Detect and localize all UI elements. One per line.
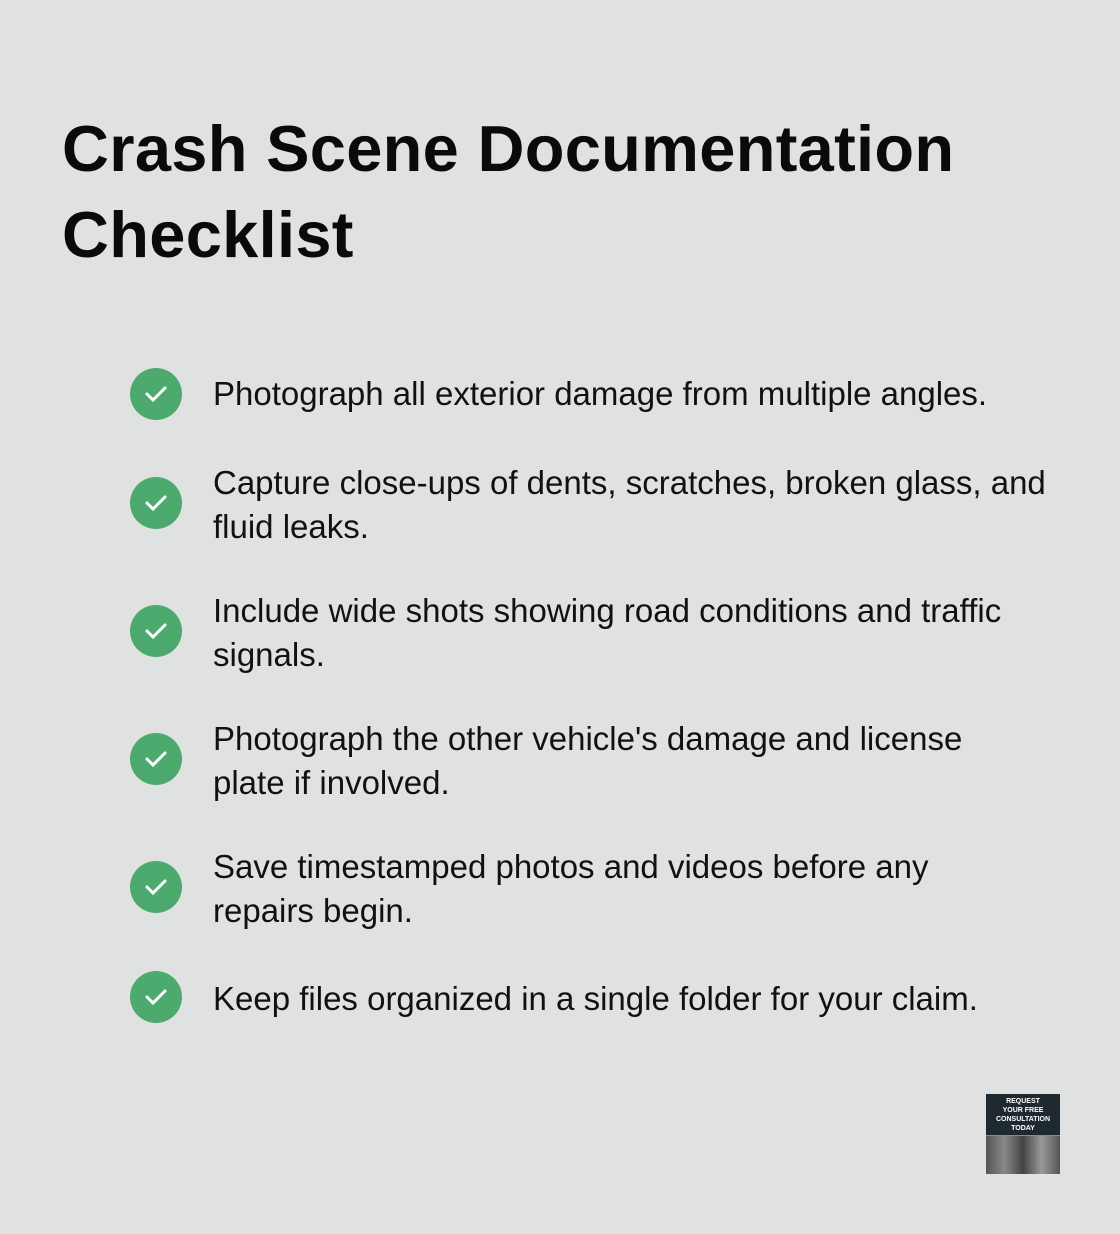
item 2	[130, 464, 1046, 545]
text 5: Save timestamped photos and videos before any	[213, 848, 928, 885]
title: Crash Scene Documentation	[62, 112, 954, 185]
text 3: signals.	[213, 636, 325, 673]
icon: check	[130, 368, 182, 420]
icon: check	[130, 861, 182, 913]
item 6	[130, 971, 978, 1023]
text 4: Photograph the other vehicle's damage and license	[213, 720, 962, 757]
text 5: repairs begin.	[213, 892, 413, 929]
text 2: fluid leaks.	[213, 508, 369, 545]
text 5	[213, 848, 928, 929]
text 3	[213, 592, 1001, 673]
text 4: plate if involved.	[213, 764, 450, 801]
icon: check	[130, 971, 182, 1023]
logo: consultation badge: CONSULTATION	[996, 1116, 1050, 1123]
text 3: Include wide shots showing road conditions and traffic	[213, 592, 1001, 629]
text 1: Photograph all exterior damage from multiple angles.	[213, 375, 987, 412]
logo: consultation badge: TODAY	[1011, 1125, 1035, 1132]
text 4	[213, 720, 962, 801]
logo: consultation badge	[986, 1094, 1060, 1173]
item 1	[130, 368, 987, 420]
text 6: Keep files organized in a single folder for your claim.	[213, 980, 978, 1017]
item 4	[130, 720, 962, 801]
item 5	[130, 848, 928, 929]
title: Checklist	[62, 198, 354, 271]
icon: check	[130, 605, 182, 657]
icon: check	[130, 733, 182, 785]
item 3	[130, 592, 1001, 673]
title	[62, 112, 954, 271]
text 2	[213, 464, 1046, 545]
logo: consultation badge: YOUR FREE	[1003, 1107, 1043, 1114]
logo: consultation badge: REQUEST	[1006, 1098, 1040, 1105]
icon: check	[130, 477, 182, 529]
text 2: Capture close-ups of dents, scratches, broken glass, and	[213, 464, 1046, 501]
